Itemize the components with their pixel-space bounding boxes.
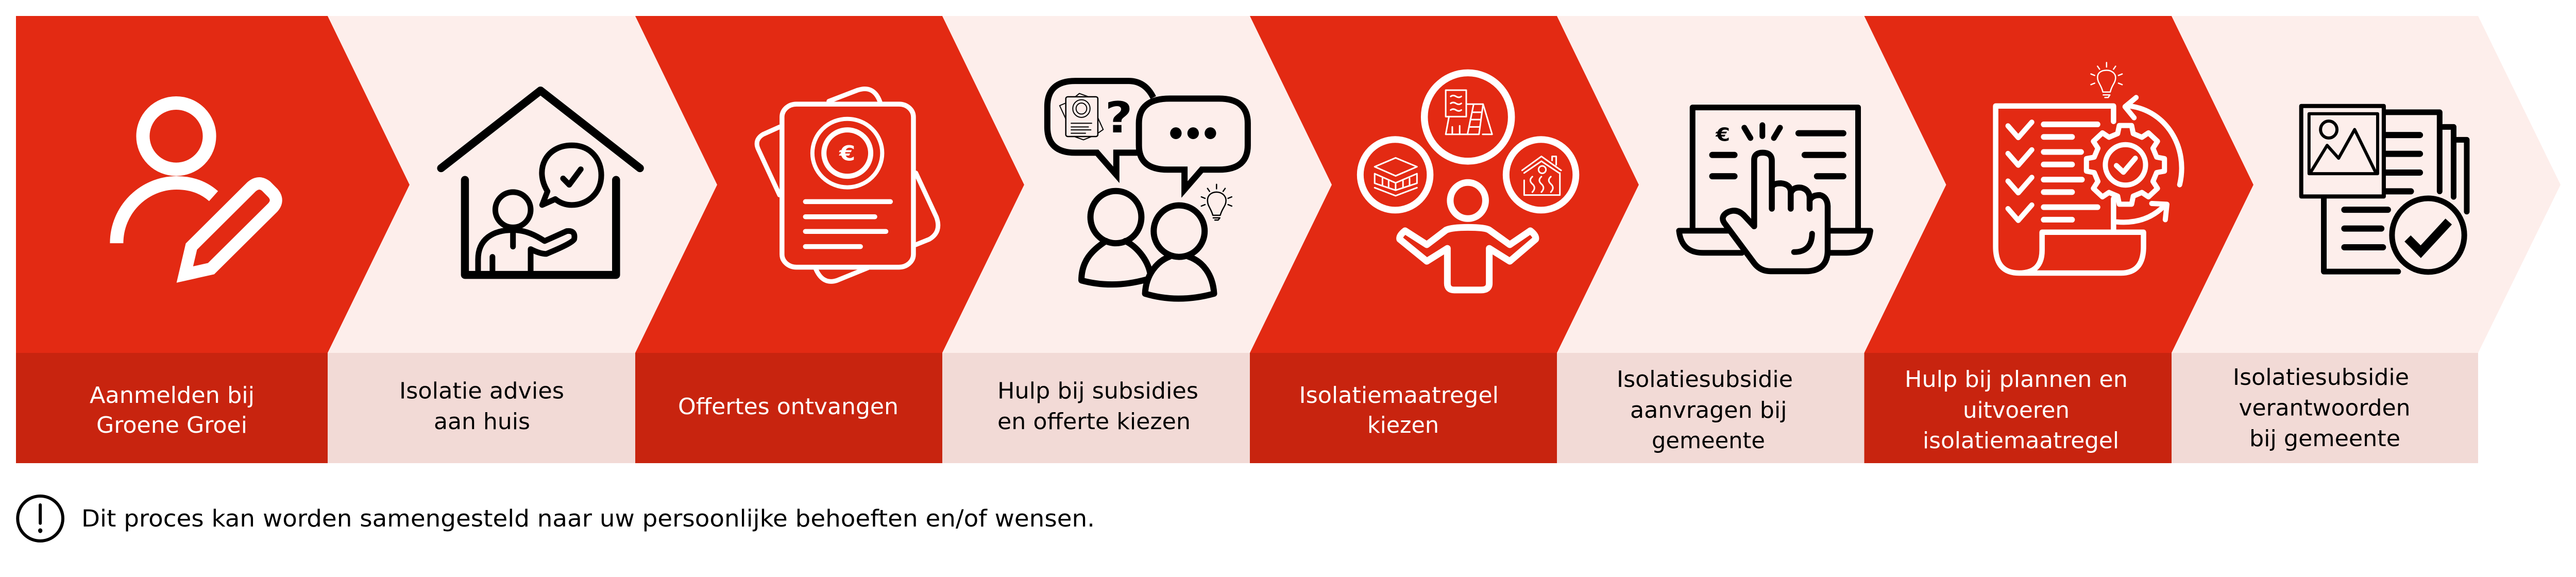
label bar	[1250, 353, 1557, 463]
icon: exclamation circle	[18, 496, 63, 541]
label: verantwoorden: verantwoorden	[2239, 395, 2410, 421]
chevron	[1250, 16, 1639, 353]
icon: checklist with gear	[1996, 62, 2182, 273]
label: maatregel	[1299, 382, 1499, 438]
chevron	[1557, 16, 1946, 353]
icon: person choosing measure	[1360, 73, 1576, 290]
label: plannen: uitvoeren	[1963, 397, 2070, 423]
label: aanvragen	[1617, 366, 1793, 454]
footnote: Dit proces kan worden samengesteld naar uw persoonlijke behoeften en/of wensen.	[81, 505, 1095, 532]
icon: quote documents	[757, 89, 938, 281]
panel: step 1 aanmelden	[16, 16, 410, 463]
label: advies: aan huis	[434, 409, 530, 435]
panel: step 7 plannen	[1864, 16, 2253, 463]
label bar	[2172, 353, 2478, 463]
label: aanmelden: Groene Groei	[96, 412, 247, 438]
label: verantwoorden	[2233, 364, 2410, 452]
label: aanmelden	[90, 382, 255, 438]
label bar	[16, 353, 328, 463]
label: advies: Isolatie advies	[399, 378, 564, 404]
panel: step 4 hulp	[942, 16, 1332, 463]
icon: documents with check	[2301, 106, 2467, 272]
panel: step 8 verantwoorden	[2172, 16, 2561, 463]
panel: step 5 maatregel	[1250, 16, 1639, 463]
chevron	[942, 16, 1332, 353]
label: maatregel: Isolatiemaatregel	[1299, 382, 1499, 409]
label: plannen: isolatiemaatregel	[1923, 428, 2119, 454]
chevron	[16, 16, 410, 353]
label: plannen	[1905, 366, 2128, 454]
label: aanmelden: Aanmelden bij	[90, 382, 255, 409]
label: hulp bij subsidies	[997, 378, 1198, 435]
label: hulp bij subsidies: en offerte kiezen	[997, 409, 1191, 435]
label: plannen: Hulp bij plannen en	[1905, 366, 2128, 393]
panel: step 3 offertes	[635, 16, 1024, 463]
icon: two people talking	[1047, 81, 1248, 299]
label bar	[942, 353, 1250, 463]
icon: laptop with hand: €	[1715, 124, 1730, 145]
icon: person with pencil	[116, 103, 276, 275]
label: verantwoorden: bij gemeente	[2249, 426, 2400, 452]
panel: step 6 aanvragen	[1557, 16, 1946, 463]
chevron	[328, 16, 717, 353]
label bar	[1557, 353, 1864, 463]
label bar	[1864, 353, 2172, 463]
label bar	[328, 353, 635, 463]
label: offertes: Offertes ontvangen	[678, 394, 899, 420]
label: verantwoorden: Isolatiesubsidie	[2233, 364, 2409, 391]
chevron	[1864, 16, 2253, 353]
icon: two people talking: ?	[1105, 93, 1132, 143]
chevron	[2172, 16, 2561, 353]
panel: step 2 advies	[328, 16, 717, 463]
icon: quote documents: €	[839, 142, 855, 165]
label: aanvragen: Isolatiesubsidie	[1617, 366, 1793, 393]
label: maatregel: kiezen	[1367, 412, 1439, 438]
label bar	[635, 353, 942, 463]
label: aanvragen: gemeente	[1652, 428, 1765, 454]
icon: house with advisor	[441, 91, 640, 275]
chevron	[635, 16, 1024, 353]
icon: laptop with hand	[1679, 108, 1870, 271]
label: advies	[399, 378, 564, 435]
label: aanvragen: aanvragen bij	[1630, 397, 1787, 423]
label: hulp bij subsidies: Hulp bij subsidies	[997, 378, 1198, 404]
